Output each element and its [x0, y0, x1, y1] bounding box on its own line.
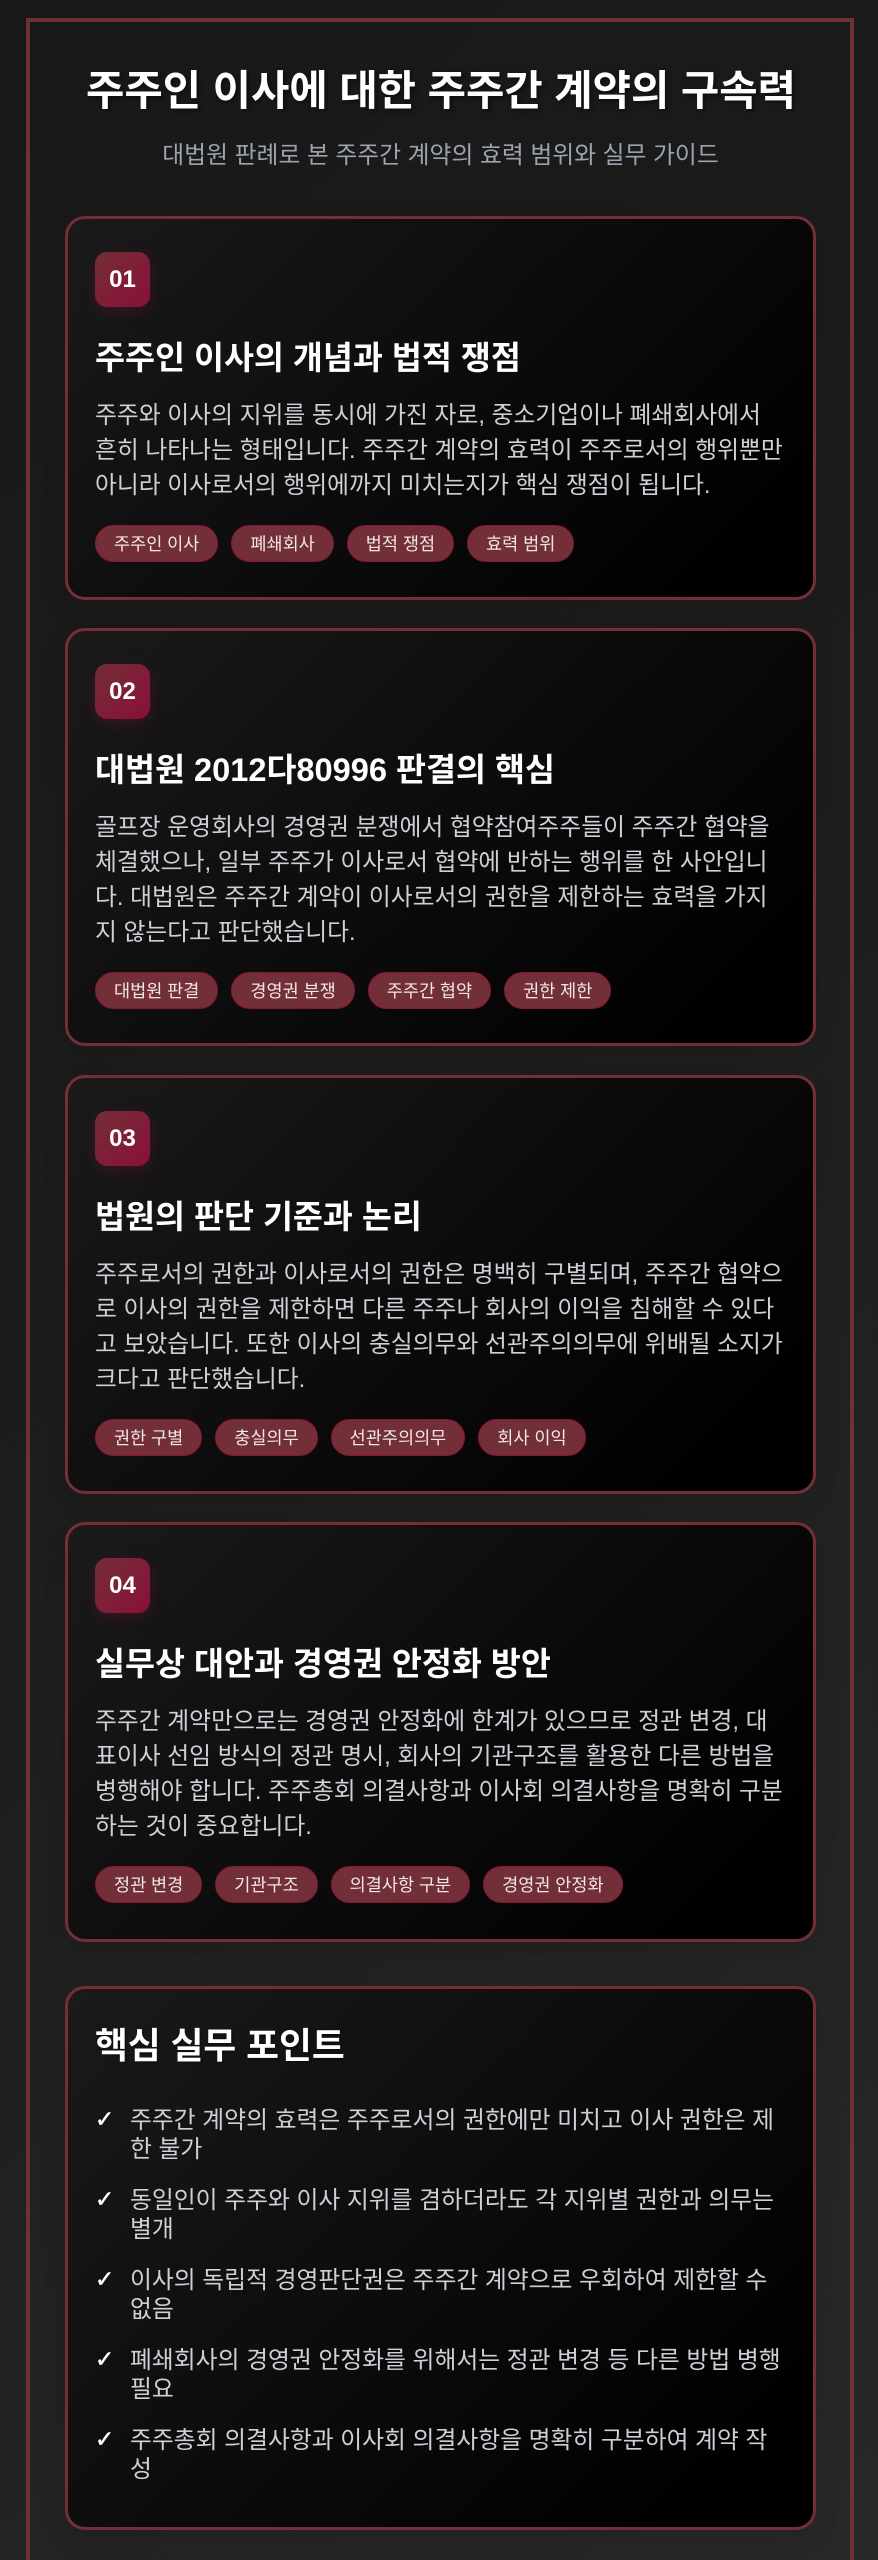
badge: 04: 04	[109, 1572, 136, 1599]
tags: section 04: 기관구조	[234, 1875, 299, 1895]
tags: section 01: 주주인 이사	[114, 534, 199, 554]
text block: section 03	[95, 1260, 783, 1393]
list item 4: ✓	[95, 2347, 114, 2373]
title: 주주인 이사에 대한 주주간 계약의 구속력	[86, 66, 796, 114]
text block: section 04: 병행해야 합니다. 주주총회 의결사항과 이사회 의결사항을 명확히 구분	[95, 1778, 783, 1805]
badge: 02	[95, 664, 150, 719]
tags: section 01: 법적 쟁점	[366, 534, 435, 554]
tags: section 02: 권한 제한	[523, 981, 592, 1001]
list item 5: 성	[130, 2456, 152, 2483]
text block: section 02: 체결했으나, 일부 주주가 이사로서 협약에 반하는 행위를 한 사안입니	[95, 849, 768, 876]
badge: 04	[95, 1558, 150, 1613]
list item 1: ✓	[95, 2107, 114, 2133]
panel: section 02	[65, 628, 816, 1046]
list item 1: 주주간 계약의 효력은 주주로서의 권한에만 미치고 이사 권한은 제	[130, 2107, 774, 2134]
tags: section 03: 회사 이익	[497, 1428, 567, 1448]
text block: section 03: 고 보았습니다. 또한 이사의 충실의무와 선관주의의무에 위배될 소지가	[95, 1331, 783, 1358]
heading: section 03: 법원의 판단 기준과 논리	[95, 1198, 422, 1234]
list item 3: 이사의 독립적 경영판단권은 주주간 계약으로 우회하여 제한할 수	[130, 2267, 767, 2294]
panel: section 01	[65, 216, 816, 600]
tags: section 04: 정관 변경	[114, 1875, 183, 1895]
tags: section 03: 충실의무	[234, 1428, 299, 1448]
text block: section 02: 다. 대법원은 주주간 계약이 이사로서의 권한을 제한하는 효력을 가지	[95, 884, 768, 911]
panel: section 03	[65, 1075, 816, 1494]
list item 1: 한 불가	[130, 2136, 202, 2163]
list item 5	[95, 2427, 767, 2483]
panel: key practical points	[65, 1986, 816, 2530]
panel: section 04	[65, 1522, 816, 1942]
list item 3: 없음	[130, 2296, 174, 2323]
text block: section 04: 하는 것이 중요합니다.	[95, 1813, 312, 1840]
list item 4	[95, 2347, 781, 2403]
badge: 02: 02	[109, 678, 136, 705]
tags: section 02: 주주간 협약	[387, 981, 472, 1001]
tags: section 01: 효력 범위	[486, 534, 555, 554]
badge: 03	[95, 1111, 150, 1166]
tags: section 03: 선관주의의무	[350, 1428, 446, 1448]
list item 3	[95, 2267, 767, 2323]
text block: section 03: 크다고 판단했습니다.	[95, 1366, 305, 1393]
list item 3: ✓	[95, 2267, 114, 2293]
tags: section 02	[95, 972, 611, 1009]
text block: section 04	[95, 1708, 783, 1840]
tags: section 01	[95, 525, 574, 562]
list item 4: 폐쇄회사의 경영권 안정화를 위해서는 정관 변경 등 다른 방법 병행	[130, 2347, 781, 2374]
text block: section 02: 지 않는다고 판단했습니다.	[95, 919, 356, 946]
list item 2: ✓	[95, 2187, 114, 2213]
subtitle: 대법원 판례로 본 주주간 계약의 효력 범위와 실무 가이드	[162, 142, 719, 169]
heading: section 04: 실무상 대안과 경영권 안정화 방안	[95, 1644, 551, 1682]
tags: section 03	[95, 1419, 586, 1456]
text block: section 01: 흔히 나타나는 형태입니다. 주주간 계약의 효력이 주주로서의 행위뿐만	[95, 437, 783, 464]
tags: section 02: 대법원 판결	[114, 981, 199, 1001]
badge: 01	[95, 252, 150, 307]
text block: section 04: 주주간 계약만으로는 경영권 안정화에 한계가 있으므로 정관 변경, 대	[95, 1708, 768, 1734]
heading: section 02: 대법원 2012다80996 판결의 핵심	[95, 750, 555, 788]
text block: section 01: 아니라 이사로서의 행위에까지 미치는지가 핵심 쟁점이 됩니다.	[95, 472, 711, 499]
tags: section 04: 경영권 안정화	[502, 1875, 604, 1895]
tags: section 04	[95, 1866, 623, 1903]
tags: section 01: 폐쇄회사	[250, 534, 315, 554]
list item 5: ✓	[95, 2427, 114, 2453]
heading: section 01: 주주인 이사의 개념과 법적 쟁점	[95, 338, 521, 376]
badge: 01: 01	[109, 266, 136, 293]
text block: section 04: 표이사 선임 방식의 정관 명시, 회사의 기관구조를 활용한 다른 방법을	[95, 1743, 774, 1770]
tags: section 03: 권한 구별	[114, 1428, 183, 1448]
text block: section 01: 주주와 이사의 지위를 동시에 가진 자로, 중소기업이나 폐쇄회사에서	[95, 402, 761, 428]
heading: key points: 핵심 실무 포인트	[95, 2026, 345, 2066]
badge: 03: 03	[109, 1125, 136, 1152]
list item 5: 주주총회 의결사항과 이사회 의결사항을 명확히 구분하여 계약 작	[130, 2427, 767, 2454]
list item 2: 별개	[130, 2216, 174, 2243]
text block: section 02: 골프장 운영회사의 경영권 분쟁에서 협약참여주주들이 주주간 협약을	[95, 814, 770, 840]
text block: section 03: 로 이사의 권한을 제한하면 다른 주주나 회사의 이익을 침해할 수 있다	[95, 1296, 774, 1323]
list item 2: 동일인이 주주와 이사 지위를 겸하더라도 각 지위별 권한과 의무는	[130, 2187, 774, 2214]
list item 2	[95, 2187, 774, 2243]
text block: section 02	[95, 814, 770, 946]
tags: section 02: 경영권 분쟁	[250, 981, 336, 1001]
list item 1	[95, 2107, 774, 2163]
list item 4: 필요	[130, 2376, 174, 2403]
text block: section 03: 주주로서의 권한과 이사로서의 권한은 명백히 구별되며, 주주간 협약으	[95, 1260, 783, 1288]
tags: section 04: 의결사항 구분	[350, 1875, 451, 1895]
text block: section 01	[95, 402, 783, 499]
